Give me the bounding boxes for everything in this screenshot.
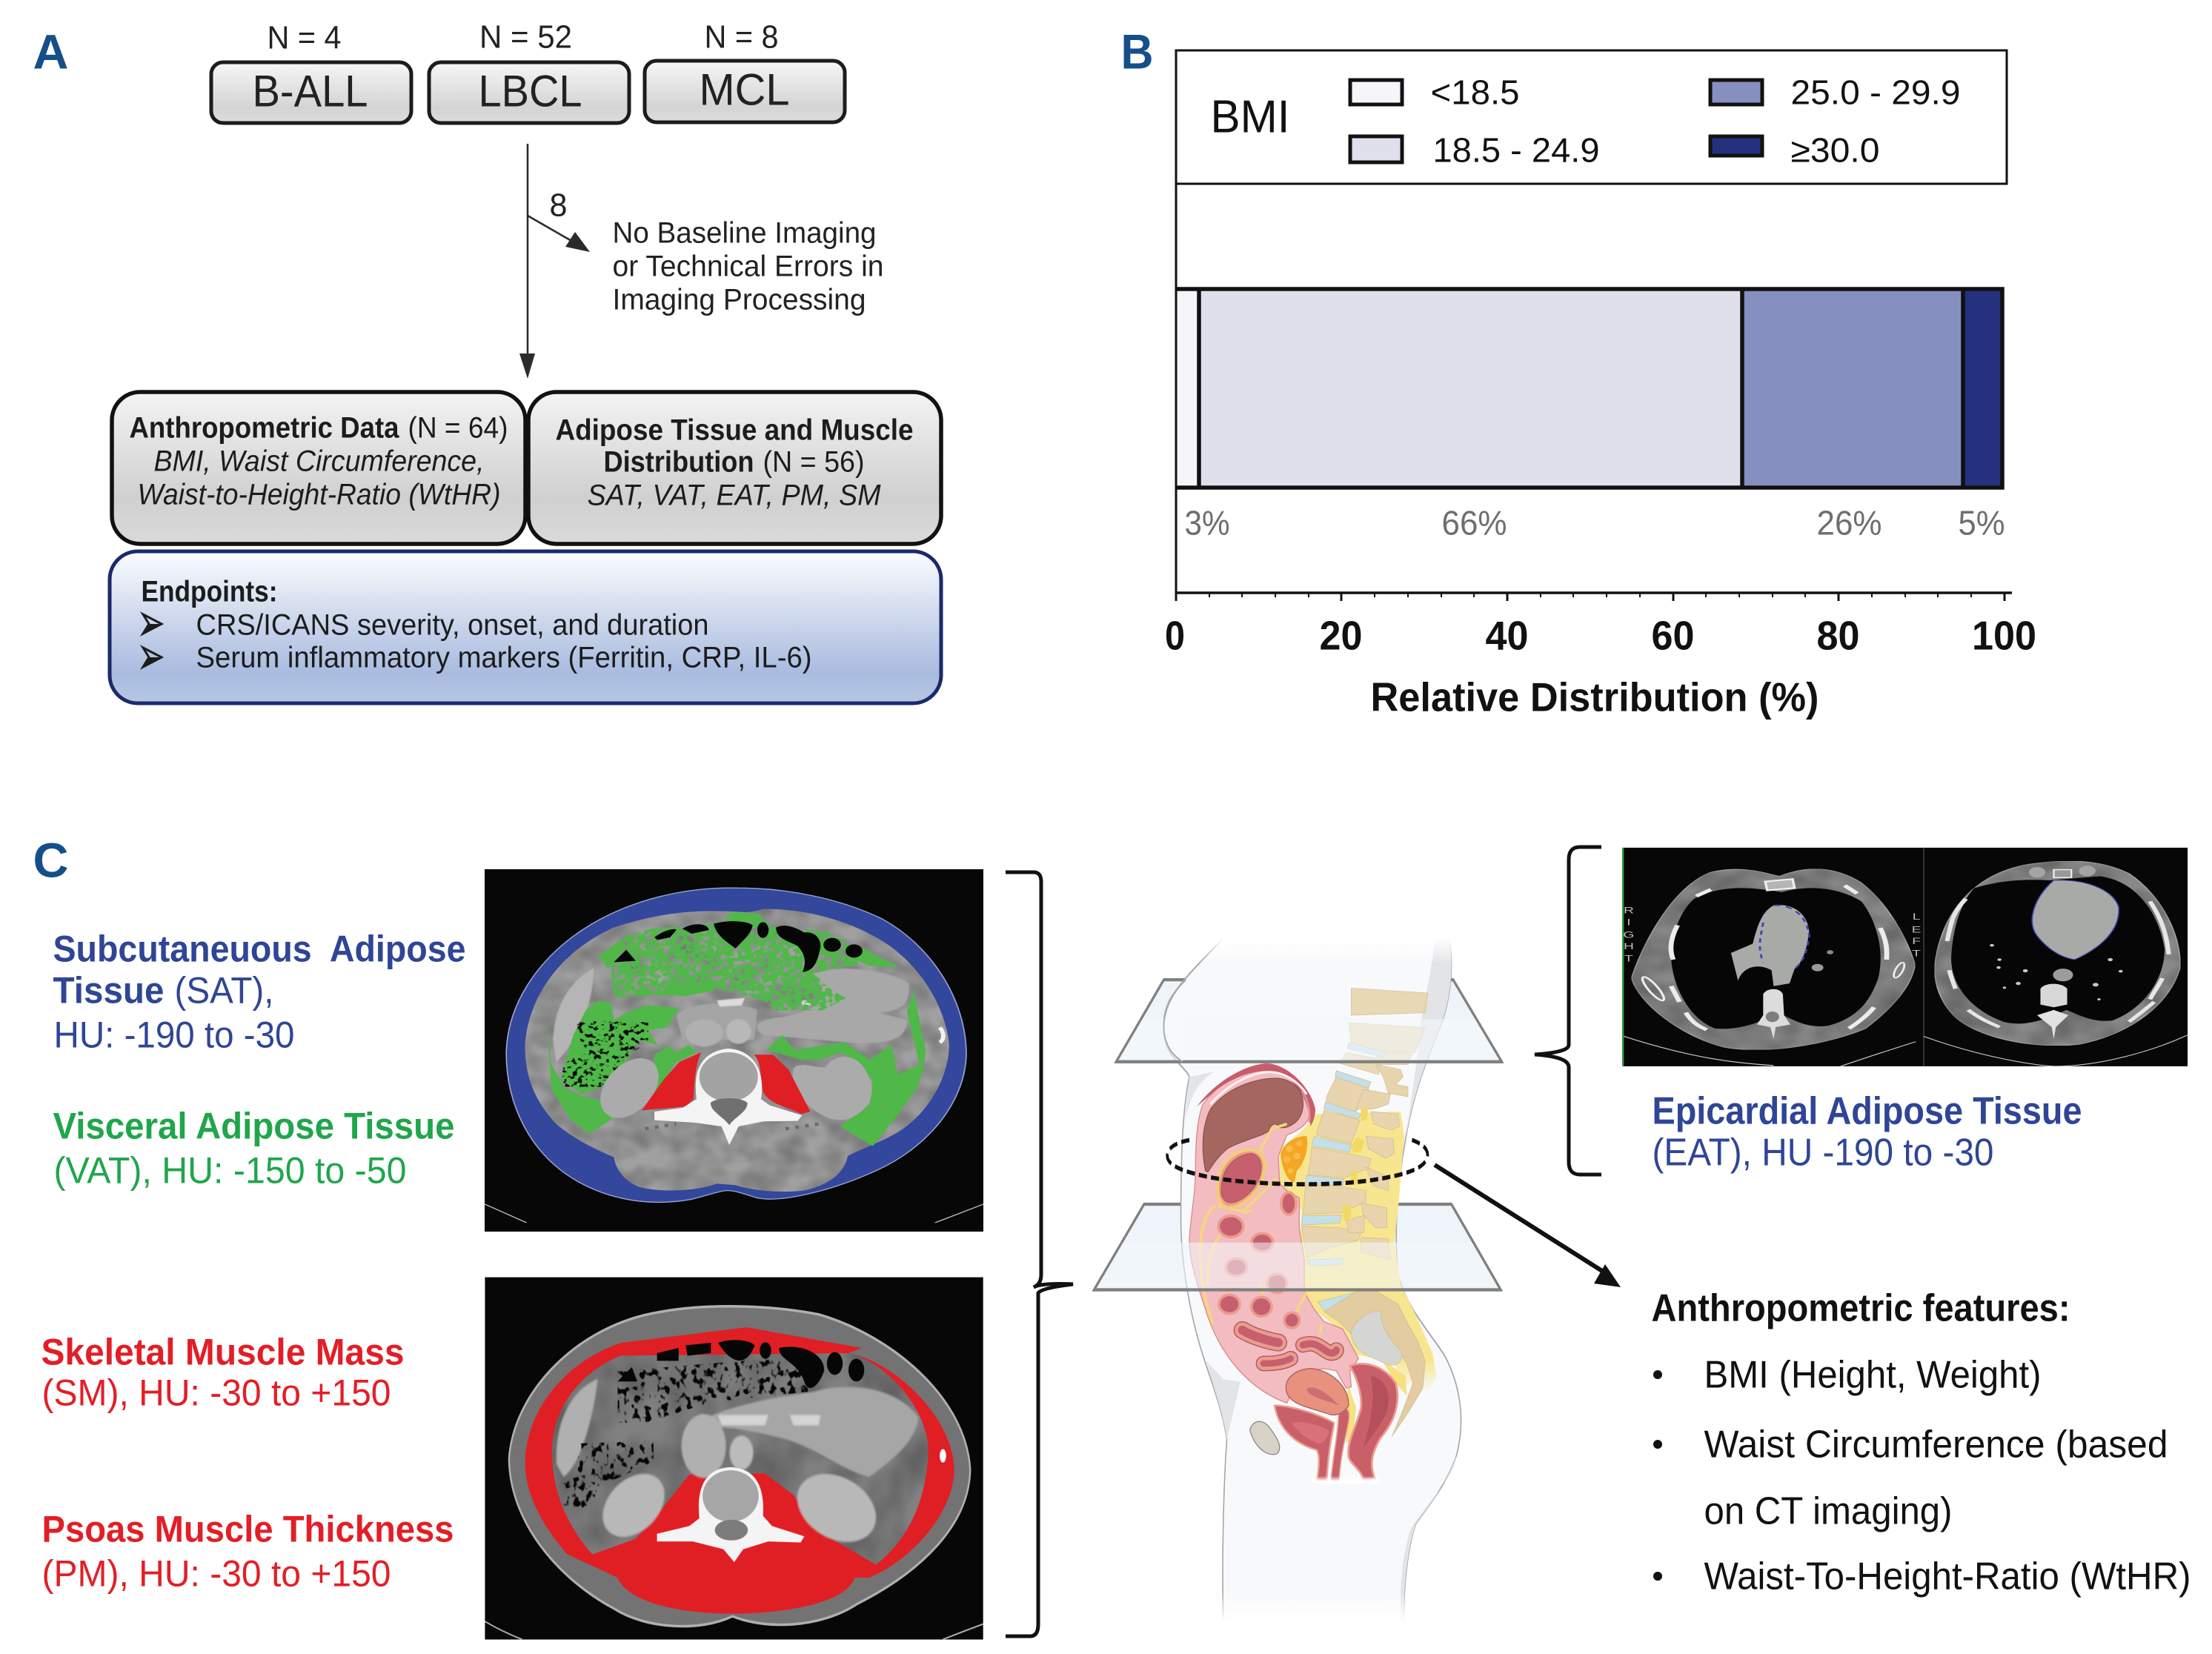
label: EAT [1653, 1089, 2082, 1174]
x axis tick labels: 80 [1817, 612, 1860, 658]
exclusion reason text [612, 216, 883, 316]
anthropometric features list: on CT imaging) [1704, 1489, 1952, 1532]
panel A: study flow diagram [33, 19, 941, 703]
colon gas [617, 1340, 824, 1388]
arrow: waist to anthropometric features [1435, 1165, 1621, 1287]
box: LBCL [429, 62, 629, 123]
label: SM [41, 1331, 405, 1414]
box: endpoints [110, 551, 941, 703]
L E F T marker: L [1913, 912, 1921, 922]
exclusion reason text: Imaging Processing [612, 283, 866, 316]
legend: 18.5 - 24.9 [1433, 130, 1599, 169]
fade at top of torso [1186, 917, 1458, 964]
kidneys [588, 1051, 671, 1126]
spine [1302, 988, 1428, 1436]
cohort count: LBCL: N = 52 [479, 19, 572, 55]
peritoneal cavity [1189, 1067, 1358, 1403]
L E F T marker: T [1912, 949, 1921, 959]
small intestine segments [1243, 1330, 1336, 1364]
label: SM: (SM), HU: -30 to +150 [41, 1372, 391, 1414]
x axis tick labels [1165, 612, 2036, 658]
panel letter C: C [33, 833, 68, 888]
back shading [1183, 930, 1456, 1624]
label: EAT: (EAT), HU -190 to -30 [1653, 1131, 1993, 1174]
legend: <18.5 [1430, 73, 1519, 111]
panel C: imaging segmentation [33, 833, 2191, 1639]
pancreas [1281, 1136, 1307, 1182]
box: B-ALL: B-ALL [252, 67, 368, 116]
bar percentage labels [1184, 504, 2005, 542]
label: VAT [53, 1106, 455, 1192]
R I G H T marker [1623, 906, 1634, 964]
dashed waist circumference ellipse [1167, 1139, 1427, 1184]
panel letter A: A [33, 24, 68, 79]
exclusion reason text: or Technical Errors in [612, 250, 883, 283]
box: anthropometric data: Anthropometric Data [129, 412, 399, 445]
L E F T marker [1912, 912, 1922, 959]
legend: BMI [1211, 92, 1289, 142]
arrow: exclusion [528, 216, 590, 252]
label: SAT: (SAT), [175, 969, 274, 1011]
plane overlay over body [1116, 1019, 1502, 1062]
label: SAT: HU: -190 to -30 [53, 1014, 295, 1055]
label: SAT [53, 928, 465, 1055]
bracket: abdominal CT images [1006, 872, 1073, 1636]
upper green mesenteric fat [598, 911, 897, 1010]
bowel loops [1218, 1192, 1300, 1328]
R I G H T marker: G [1623, 930, 1634, 940]
retroperitoneal and subcutaneous fat [1280, 1112, 1436, 1393]
CT image: SAT VAT segmentation [485, 869, 983, 1232]
anthropometric features list: Waist Circumference (based [1704, 1423, 2168, 1466]
bar percentage labels: 66% [1442, 504, 1507, 542]
vertebra [657, 1467, 804, 1562]
x axis tick labels: 20 [1319, 612, 1362, 658]
pubic bone [1250, 1421, 1280, 1455]
box: MCL: MCL [700, 65, 790, 114]
exclusion reason text: No Baseline Imaging [612, 216, 876, 249]
x axis tick labels: 100 [1972, 612, 2036, 658]
upper imaging plane [1116, 980, 1502, 1062]
R I G H T marker: I [1627, 917, 1631, 927]
box: B-ALL [211, 62, 411, 123]
bowel gas [614, 921, 820, 972]
fade at bottom of torso [1206, 1592, 1424, 1634]
label: VAT: (VAT), HU: -150 to -50 [53, 1150, 406, 1192]
R I G H T marker: T [1624, 954, 1633, 964]
box: anthropometric data [112, 392, 525, 544]
cohort count: MCL: N = 8 [704, 19, 778, 55]
lower left green speckled fat [561, 1000, 680, 1095]
anthropometric features list: Waist-To-Height-Ratio (WtHR) [1704, 1555, 2191, 1598]
CT image: SM PM segmentation [485, 1278, 983, 1639]
internal organs [1189, 988, 1436, 1484]
label: SAT: Subcutaneuous Adipose [53, 928, 465, 969]
label: PM: (PM), HU: -30 to +150 [41, 1553, 391, 1595]
box: anthropometric data: Waist-to-Height-Ratio (WtHR) [138, 479, 501, 511]
x axis tick labels: 40 [1485, 612, 1528, 658]
legend: ≥30.0 [1790, 130, 1879, 169]
box: endpoints: Serum inflammatory markers (Ferritin, CRP, IL-6) [196, 642, 812, 674]
breast contour over plane [1164, 980, 1186, 1062]
bladder [1275, 1406, 1334, 1482]
mesentery [1200, 1124, 1321, 1334]
label: PM: Psoas Muscle Thickness [41, 1509, 454, 1550]
lower imaging plane [1094, 1204, 1501, 1290]
cervix and vagina [1331, 1406, 1349, 1482]
R I G H T marker: H [1624, 942, 1634, 951]
box: anthropometric data: BMI, Waist Circumference, [154, 445, 485, 477]
anthropometric features list: Anthropometric features: [1651, 1286, 2070, 1329]
R I G H T marker: R [1624, 906, 1634, 916]
organ cut-off fade [1312, 1476, 1381, 1484]
label: SM: Skeletal Muscle Mass [41, 1331, 405, 1372]
x axis title: Relative Distribution (%) [1371, 674, 1819, 720]
label: VAT: Visceral Adipose Tissue [53, 1106, 455, 1147]
chest slice right [1935, 861, 2180, 1046]
bar percentage labels: 5% [1958, 504, 2005, 542]
label: SAT: Tissue [53, 969, 165, 1011]
label: EAT: Epicardial Adipose Tissue [1653, 1089, 2082, 1132]
box: adipose tissue and muscle distribution: Distribution [603, 446, 754, 479]
lower right green fat [767, 991, 926, 1146]
bar percentage labels: 26% [1817, 504, 1882, 542]
L E F T marker: F [1912, 937, 1921, 946]
box: adipose tissue and muscle distribution: (N = 56) [763, 446, 864, 479]
liver [1203, 1078, 1303, 1172]
stomach [1218, 1150, 1265, 1207]
x axis and ticks [1175, 184, 2012, 601]
pelvic organs [1250, 1364, 1398, 1482]
box: adipose tissue and muscle distribution [528, 392, 941, 544]
box: endpoints: CRS/ICANS severity, onset, and duration [196, 609, 708, 642]
uterus [1286, 1369, 1349, 1415]
diaphragm [1197, 1063, 1315, 1126]
legend: 25.0 - 29.9 [1790, 73, 1961, 111]
box: adipose tissue and muscle distribution: Adipose Tissue and Muscle [556, 414, 913, 446]
bar percentage labels: 3% [1184, 504, 1230, 542]
anthropometric features list: BMI (Height, Weight) [1704, 1353, 2041, 1396]
panel B: BMI stacked bar chart [1120, 24, 2036, 720]
box: endpoints: Endpoints: [141, 575, 277, 608]
L E F T marker: E [1912, 925, 1922, 934]
CT image: chest epicardial fat [1622, 848, 2188, 1066]
speckled colon contents [617, 1355, 808, 1423]
sacrum and coccyx [1318, 1289, 1425, 1436]
arrow: flow down to analysis [519, 144, 535, 379]
vertebra [654, 1049, 802, 1145]
x axis tick labels: 60 [1651, 612, 1694, 658]
panel letter B: B [1120, 24, 1153, 79]
stacked bar [1176, 289, 2002, 488]
rectum [1348, 1364, 1398, 1480]
box: anthropometric data: (N = 64) [408, 412, 508, 445]
illustration: sagittal torso anatomy with planes [1094, 917, 1502, 1634]
box: adipose tissue and muscle distribution: SAT, VAT, EAT, PM, SM [587, 479, 881, 511]
legend [1176, 50, 2007, 184]
solid fat patches [598, 913, 897, 997]
x axis tick labels: 0 [1165, 612, 1185, 658]
cohort count: B-ALL: N = 4 [267, 19, 341, 56]
psoas muscle [642, 1052, 701, 1110]
bracket: chest CT images [1535, 847, 1601, 1175]
body outline [1163, 930, 1461, 1624]
box: LBCL: LBCL [479, 67, 582, 116]
anthropometric features list [1651, 1286, 2191, 1598]
exclusion count: 8 [550, 187, 568, 224]
box: MCL [645, 61, 845, 122]
chest slice left [1632, 869, 1915, 1049]
label: PM [41, 1509, 454, 1595]
